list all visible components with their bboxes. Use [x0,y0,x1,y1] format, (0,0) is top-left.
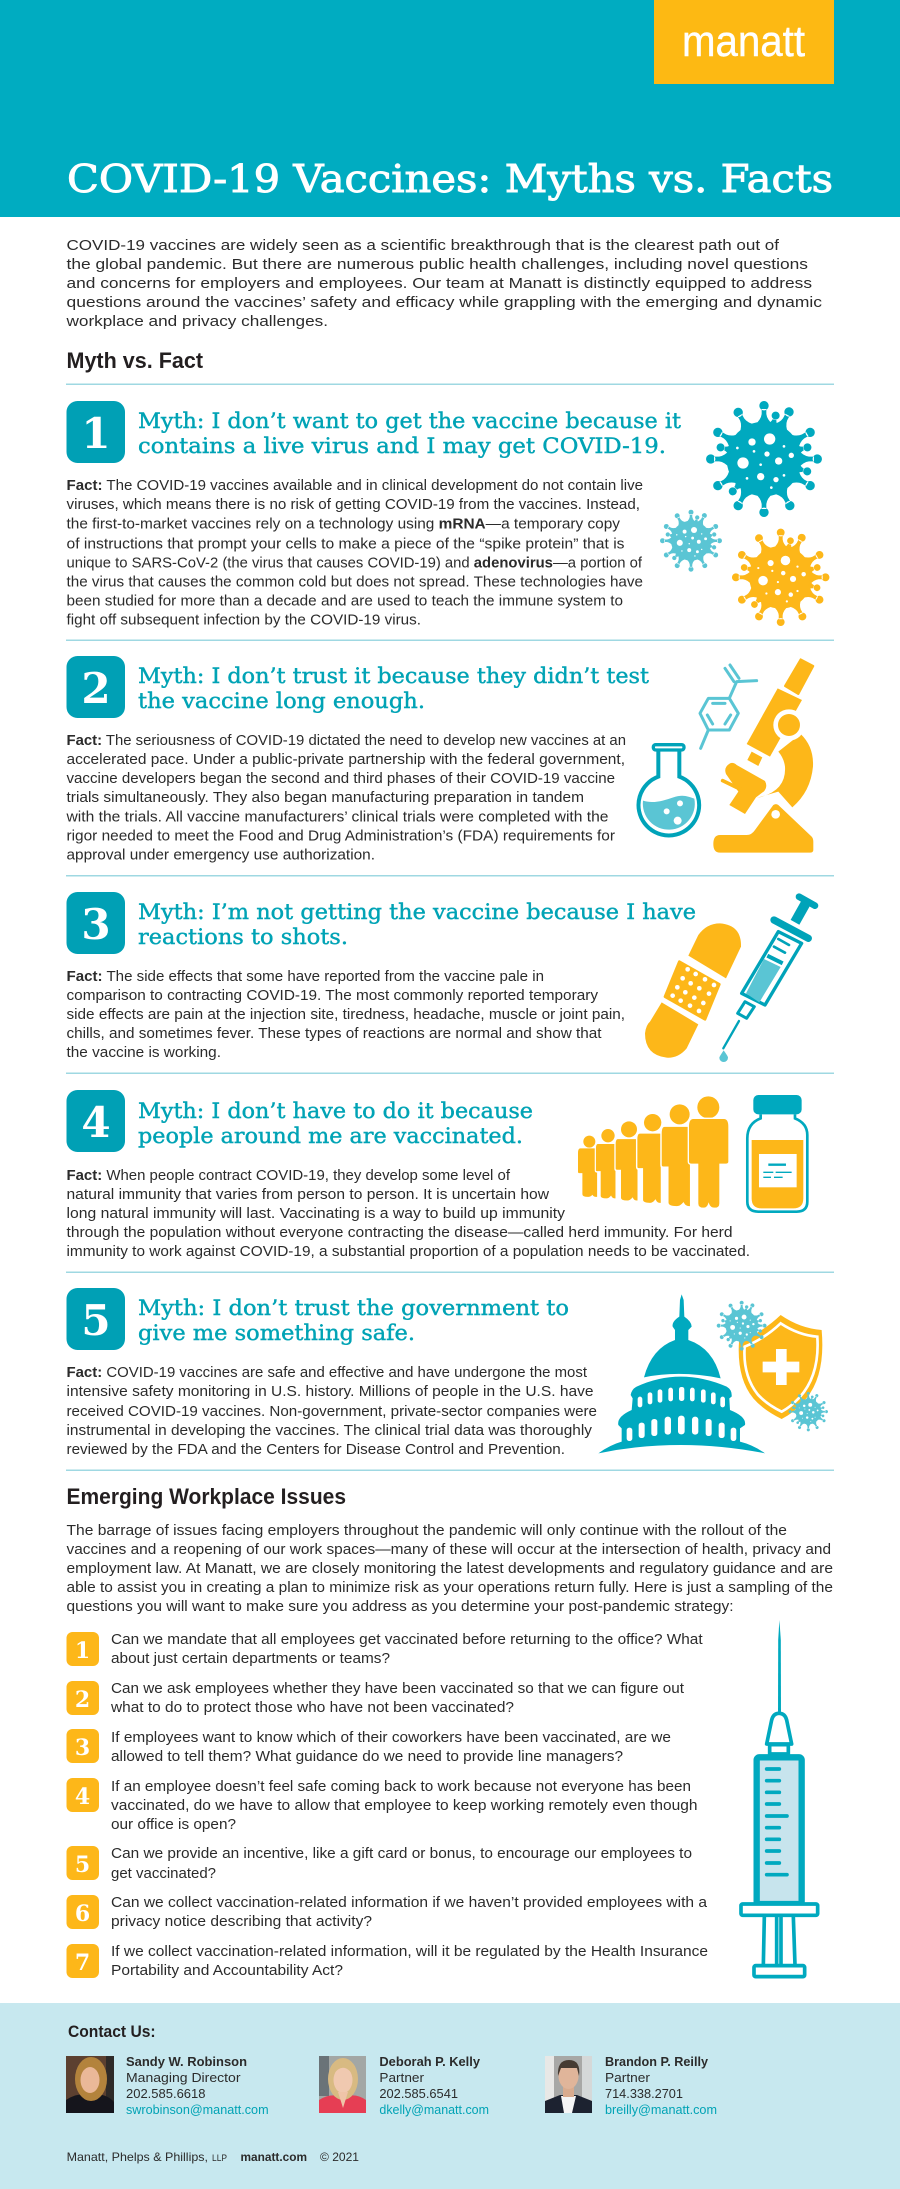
myth 4 heading [138,1099,533,1148]
fact 1 text: the first-to-market vaccines rely on a technology using mRNA—a temporary copy [66,516,621,532]
myth 1 heading: Myth: I don’t want to get the vaccine because it [138,409,682,433]
contact heading: Contact Us: [68,2023,156,2041]
question 7: Portability and Accountability Act? [111,1962,343,1979]
intro text: COVID-19 vaccines are widely seen as a scientific breakthrough that is the clearest path out of [66,237,780,254]
fact 1 text: been studied for more than a decade and are used to teach the immune system to [66,592,623,610]
fact 2 text: with the trials. All vaccine manufacturers’ clinical trials were completed with the [65,808,609,826]
title: COVID-19 Vaccines: Myths vs. Facts [67,157,833,201]
photo: Brandon P. Reilly [545,2056,592,2113]
icon: capitol, shield and viruses [598,1294,828,1453]
details: Sandy W. Robinson: 202.585.6618 [126,2086,206,2101]
details: Deborah P. Kelly: Deborah P. Kelly [379,2054,481,2069]
myth 1 heading [138,409,682,458]
myth 4 heading: people around me are vaccinated. [138,1124,523,1148]
myth 5 heading: Myth: I don’t trust the government to [138,1296,569,1320]
fact 2 text: approval under emergency use authorization. [66,846,375,864]
fact 2 text: vaccine developers began the second and third phases of their COVID-19 vaccine [66,770,615,787]
details: Sandy W. Robinson: swrobinson@manatt.com [126,2102,269,2117]
fact 1 text: of instructions that prompt your cells to make a piece of the “spike protein” that is [66,536,624,552]
footer: © 2021 [320,2150,359,2164]
fact 5 text: reviewed by the FDA and the Centers for Disease Control and Prevention. [66,1441,565,1458]
emerging issues paragraph: The barrage of issues facing employers throughout the pandemic will only continue with the rollout of the [66,1522,787,1539]
small viruses [717,1301,767,1351]
fact 4 text: long natural immunity will last. Vaccinating is a way to build up immunity [66,1205,566,1222]
question 2: 2 [75,1687,90,1713]
fact 5 text: Fact: COVID-19 vaccines are safe and effective and have undergone the most [66,1364,588,1381]
intro text: questions around the vaccines’ safety and efficacy while grappling with the emerging and dynamic [66,294,823,311]
heading: Myth vs. Fact: Myth vs. Fact [66,348,204,373]
fact 5 text: instrumental in developing the vaccines. The clinical trial data was thoroughly [66,1422,593,1439]
question 1: Can we mandate that all employees get vaccinated before returning to the office? What [111,1631,703,1648]
details: Brandon P. Reilly: 714.338.2701 [605,2086,683,2101]
fact 5 text: intensive safety monitoring in U.S. history. Millions of people in the U.S. have [66,1383,594,1400]
fact 2 text: accelerated pace. Under a public-private partnership with the federal government, [66,751,625,768]
number badge 4 [66,1090,125,1152]
question list [66,1631,708,1979]
number badge 5 [66,1288,125,1350]
fact 3 text: chills, and sometimes fever. These types of reactions are normal and show that [66,1025,602,1042]
question 2: Can we ask employees whether they have been vaccinated so that we can figure out [111,1680,685,1697]
emerging issues paragraph: vaccines and a reopening of our work spaces—many of these will occur at the intersection of health, privacy and [66,1541,831,1558]
question 6: privacy notice describing that activity? [111,1913,372,1930]
myth 3 heading: Myth: I’m not getting the vaccine because I have [138,900,696,924]
question 4: vaccinated, do we have to allow that employee to keep working remotely even though [111,1797,698,1814]
question 7 [66,1943,708,1979]
question 3: 3 [75,1735,90,1761]
photo: Deborah P. Kelly [319,2056,366,2113]
vial [747,1095,807,1212]
fact 1 text: fight off subsequent infection by the COVID-19 virus. [66,612,421,628]
myth 3 heading: reactions to shots. [138,925,348,949]
emerging issues paragraph: questions you will want to make sure you address as you determine your post-pandemic strategy: [66,1598,734,1615]
fact 1 text: the virus that causes the common cold but does not spread. These technologies have [66,574,643,590]
footer: manatt.com [240,2150,307,2164]
question 3 [66,1729,671,1765]
details: Deborah P. Kelly: dkelly@manatt.com [379,2102,489,2117]
bandage [645,923,741,1058]
heading: Emerging Workplace Issues: Emerging Workplace Issues [66,1484,346,1509]
emerging issues paragraph: able to assist you in creating a plan to minimize risk as your operations return fully. Here is just a sampling of the [66,1579,833,1596]
details: Sandy W. Robinson: Sandy W. Robinson [126,2054,247,2069]
fact 3 text [66,968,625,1061]
question 4: If an employee doesn’t feel safe coming back to work because not everyone has been [111,1778,691,1795]
number badge 2: 2 [81,664,111,713]
panel: myth 1 [66,401,829,628]
number badge 4: 4 [81,1098,111,1147]
syringe [723,897,815,1048]
question 3: allowed to tell them? What guidance do we need to provide line managers? [111,1748,623,1765]
icon: viruses [660,401,829,626]
contact: Sandy W. Robinson [66,2054,269,2117]
question 6: 6 [75,1901,90,1927]
details: Sandy W. Robinson [126,2054,269,2117]
fact 1 text: viruses, which means there is no risk of getting COVID-19 from the vaccines. Instead, [66,496,640,513]
details: Brandon P. Reilly [605,2054,717,2117]
fact 3 text: side effects are pain at the injection site, tiredness, headache, muscle or joint pain, [66,1006,625,1023]
fact 1 text: unique to SARS-CoV-2 (the virus that causes COVID-19) and adenovirus—a portion of [66,554,643,572]
fact 3 text: the vaccine is working. [66,1044,221,1061]
fact 5 text [66,1364,597,1458]
myth 2 heading: the vaccine long enough. [138,689,425,713]
intro text: workplace and privacy challenges. [65,313,328,330]
question 4 [66,1778,698,1833]
question 5: 5 [75,1852,90,1878]
footer: Manatt, Phelps & Phillips, [67,2150,208,2164]
question 7: 7 [75,1950,90,1976]
fact 3 text: Fact: The side effects that some have reported from the vaccine pale in [66,968,544,985]
panel: myth 3 [66,892,815,1062]
number badge 2 [66,656,125,718]
myth 4 heading: Myth: I don’t have to do it because [138,1099,533,1123]
footer: LLP [212,2153,227,2163]
number badge 1: 1 [81,409,111,458]
question 5 [66,1845,692,1882]
logo: manatt [654,0,834,84]
fact 2 text [65,732,626,864]
myth 2 heading: Myth: I don’t trust it because they didn’t test [138,664,650,688]
question 2 [66,1680,685,1716]
panel: myth 2 [65,656,813,864]
fact 2 text: trials simultaneously. They also began manufacturing preparation in tandem [66,789,584,806]
capitol building [598,1294,765,1453]
intro text: the global pandemic. But there are numerous public health challenges, including novel questions [66,256,808,273]
intro text [65,237,823,330]
myth 3 heading [138,900,696,949]
footer [67,2150,359,2164]
question 6: Can we collect vaccination-related information if we haven’t provided employees with a [111,1894,708,1911]
fact 3 text: comparison to contracting COVID-19. The most commonly reported temporary [66,987,599,1004]
details: Sandy W. Robinson: Managing Director [126,2070,241,2085]
details: Deborah P. Kelly [379,2054,489,2117]
details: Deborah P. Kelly: Partner [379,2070,425,2085]
question 4: 4 [75,1784,90,1810]
question 5: Can we provide an incentive, like a gift card or bonus, to encourage our employees to [111,1845,692,1862]
icon: bandage and syringe [645,897,815,1062]
emerging issues paragraph: employment law. At Manatt, we are closely monitoring the latest developments and regulatory guidance and are [66,1560,833,1577]
fact 1 text [66,477,643,628]
contact: Deborah P. Kelly [319,2054,489,2117]
icon: microscope, flask and molecule [638,659,813,853]
question 5: get vaccinated? [111,1865,216,1882]
fact 5 text: received COVID-19 vaccines. Non-government, private-sector companies were [66,1403,597,1420]
fact 1 text: Fact: The COVID-19 vaccines available and in clinical development do not contain live [66,477,643,494]
number badge 3 [66,892,125,954]
fact 4 text: through the population without everyone contracting the disease—called herd immunity. For herd [66,1224,732,1241]
molecule [700,665,757,748]
fact 2 text: Fact: The seriousness of COVID-19 dictated the need to develop new vaccines at an [66,732,626,749]
question 1: 1 [75,1638,90,1664]
number badge 1 [66,401,125,463]
details: Brandon P. Reilly: Brandon P. Reilly [605,2054,709,2069]
question 3: If employees want to know which of their coworkers have been vaccinated, are we [111,1729,671,1746]
panel: myth 5 [66,1288,828,1458]
number badge 3: 3 [81,900,111,949]
question 2: what to do to protect those who have not been vaccinated? [110,1699,514,1716]
fact 4 text: immunity to work against COVID-19, a substantial proportion of a population needs to be vaccinated. [66,1243,750,1260]
contact: Brandon P. Reilly [545,2054,717,2117]
question 6 [66,1894,708,1930]
panel: myth 4 [66,1090,807,1260]
details: Brandon P. Reilly: Partner [605,2070,651,2085]
question 7: If we collect vaccination-related information, will it be regulated by the Health Insurance [111,1943,708,1960]
details: Deborah P. Kelly: 202.585.6541 [379,2086,458,2101]
people [578,1096,729,1208]
myth 5 heading [138,1296,569,1345]
contact band [0,2003,900,2189]
logo: manatt: manatt [682,17,805,66]
shield [739,1315,822,1419]
myth 2 heading [138,664,650,713]
header band [0,0,900,217]
fact 4 text [66,1167,750,1260]
emerging issues paragraph [66,1522,833,1615]
photo: Sandy W. Robinson [66,2056,114,2113]
question 1: about just certain departments or teams? [111,1650,390,1667]
fact 4 text: natural immunity that varies from person to person. It is uncertain how [66,1186,549,1203]
microscope [713,659,813,853]
myth 5 heading: give me something safe. [138,1321,415,1345]
intro text: and concerns for employers and employees. Our team at Manatt is distinctly equipped to address [66,275,812,292]
droplet [719,1050,728,1062]
flask [638,745,699,835]
fact 4 text: Fact: When people contract COVID-19, they develop some level of [66,1167,511,1184]
number badge 5: 5 [81,1296,111,1345]
icon: large syringe [741,1620,818,1977]
details: Brandon P. Reilly: breilly@manatt.com [605,2102,717,2117]
icon: people and vaccine vial [578,1095,807,1212]
myth 1 heading: contains a live virus and I may get COVID-19. [138,434,666,458]
question 1 [66,1631,703,1667]
fact 2 text: rigor needed to meet the Food and Drug Administration’s (FDA) requirements for [66,828,615,844]
question 4: our office is open? [111,1816,236,1833]
